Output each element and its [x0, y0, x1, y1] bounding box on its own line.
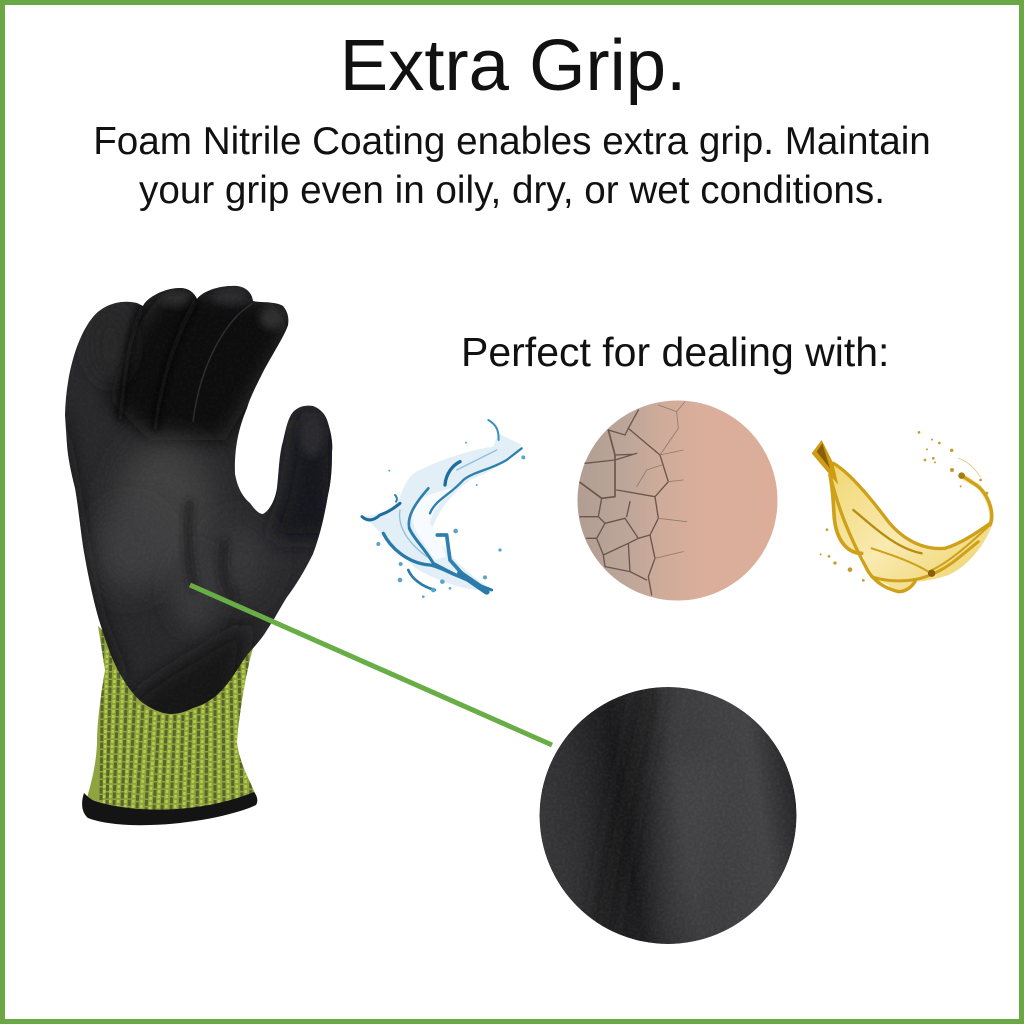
illustration graphics: [65, 286, 994, 944]
icon: oil swirl: [812, 431, 994, 592]
subtitle text: Foam Nitrile Coating enables extra grip. Maintain: [93, 120, 931, 163]
heading: perfect for dealing with: Perfect for dealing with:: [461, 329, 889, 375]
glove palm and fingers: [65, 286, 332, 714]
foam texture closeup circle: [535, 680, 805, 950]
title: Extra Grip.: [340, 25, 686, 106]
palm highlights: [115, 440, 215, 580]
glove cuff hem: [82, 792, 257, 825]
glove knit cuff: [88, 626, 257, 810]
icon: glove: [50, 280, 340, 825]
finger shadows: [110, 290, 290, 440]
subtitle text: [93, 120, 931, 212]
icon: dry cracked skin circle: [578, 400, 778, 600]
finger creases: [193, 303, 253, 422]
subtitle text: your grip even in oily, dry, or wet conditions.: [139, 169, 885, 212]
pointer line: [190, 585, 552, 745]
icon: water splash: [362, 420, 525, 598]
